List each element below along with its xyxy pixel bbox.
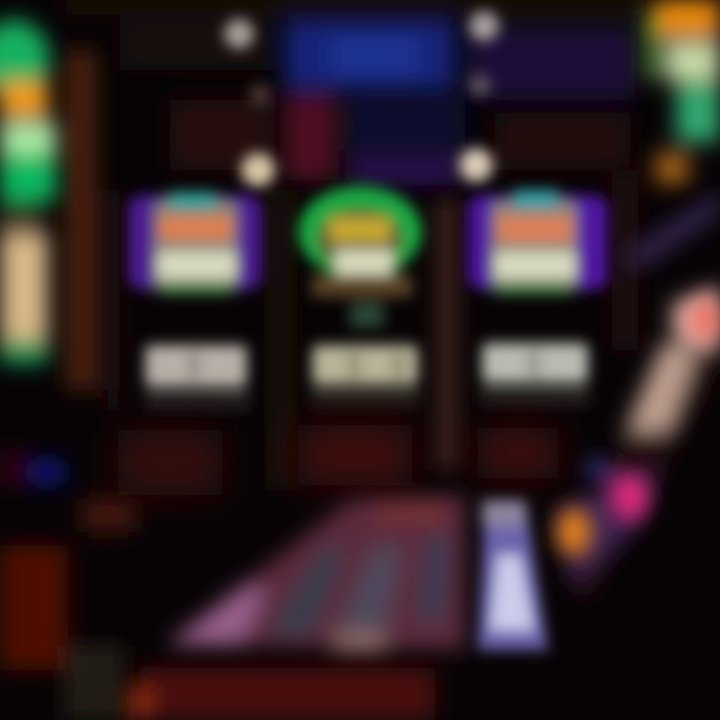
colored game buttons	[557, 300, 719, 556]
bottom red band	[128, 668, 435, 720]
machine 1 top screen	[128, 192, 262, 294]
machine lower red panels	[118, 425, 558, 495]
top right corner machine	[645, 0, 720, 184]
bright floor panel	[478, 500, 548, 650]
ceiling and back wall	[60, 0, 650, 185]
machine 3 top screen	[468, 190, 608, 294]
carpeted aisle	[165, 495, 465, 654]
machine 2 top screen	[298, 186, 422, 328]
right foreground diagonal panel	[555, 190, 720, 600]
lights	[224, 11, 499, 187]
left lower cabinet	[0, 450, 136, 720]
lower reel displays	[145, 343, 590, 409]
cabinet pillars	[66, 50, 638, 490]
left edge machine	[0, 20, 56, 364]
